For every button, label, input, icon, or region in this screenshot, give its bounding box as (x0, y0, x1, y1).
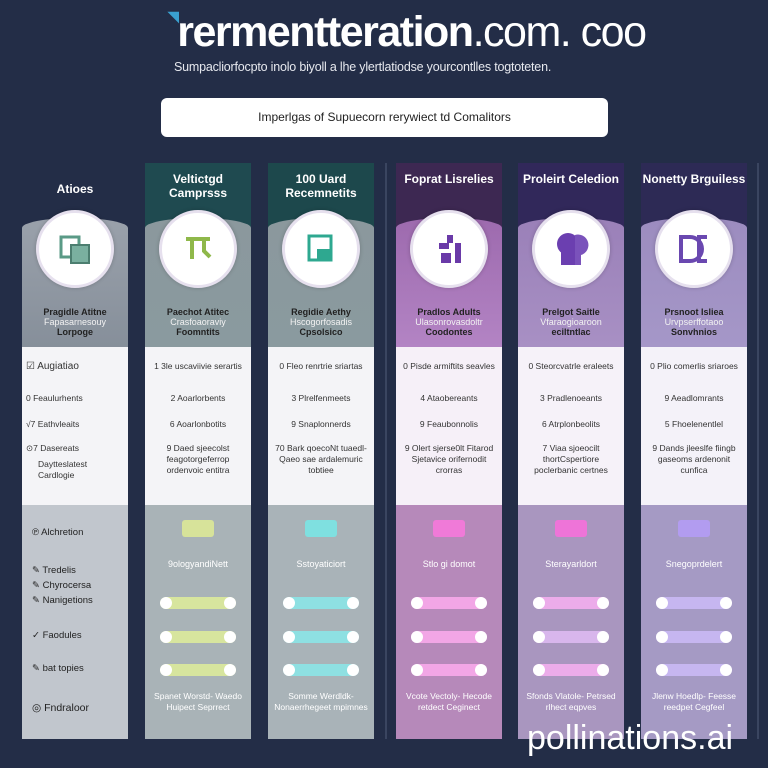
panel: col3: Sstoyaticiort (296, 559, 346, 569)
panel: col3: 3 Plrelfenmeets (291, 393, 351, 403)
panel: col3: 0 Fleo renrtrie sriartas (279, 361, 363, 371)
panel: col2: 9 Daed sjeecolst feagotorgeferrop ordenvoic entitra (167, 443, 229, 475)
banner: Imperlgas of Supuecorn rerywiect td Comalitors (258, 110, 511, 124)
subtitle: Sumpacliorfocpto inolo biyoll a lhe ylertlatiodse yourcontlles togtoteten. (174, 60, 551, 74)
panel: col3: Hscogorfosadis (290, 317, 352, 327)
panel: col6: Jlenw Hoedlp- Feesse reedpet Cegfeel (652, 691, 736, 712)
panel: col6: 9 Aeadlomrants (664, 393, 724, 403)
panel: col2: Spanet Worstd- Waedo Huipect Seprrect (154, 691, 242, 712)
panel: col4 (396, 163, 502, 739)
panel: col1: ⊙7 Dasereats (26, 443, 79, 453)
panel: col2: Veltictgd Camprsss (169, 172, 227, 200)
panel: col1: √7 Eathvleaits (26, 419, 79, 429)
panel: col2: Crasfoaoraviy (170, 317, 226, 327)
panel: col6 (641, 163, 747, 739)
panel: col1: Pragidle Atitne Lorpoge (43, 307, 107, 337)
panel: col4: 4 Ataobereants (420, 393, 478, 403)
panel: col4: 9 Olert sjerse0lt Fitarod Sjetavice orifernodit crorras (405, 443, 493, 475)
panel: col5: Proleirt Celedion (523, 172, 619, 186)
panel: col6: Prsnoot Isliea Sonvhnios (664, 307, 724, 337)
panel: col3: 70 Bark qoecoNt tuaedl-Qaeo sae ardalemuric tobtiee (275, 443, 367, 475)
title: ◥rermentteration.com. coo (168, 8, 645, 56)
panel: col4: 0 Pisde armiftits seavles (403, 361, 495, 371)
panel: col1: ◎ Fndraloor (32, 702, 89, 714)
panel: col2 (145, 163, 251, 739)
panel: col2: 6 Aoarlonbotits (170, 419, 226, 429)
panel: col1: ✎ bat topies (32, 663, 84, 674)
panel: col5: Sterayarldort (545, 559, 597, 569)
divider lines (385, 163, 387, 739)
panel: col5: Vfaraogioaroon (540, 317, 602, 327)
panel: col6: 9 Dands jleeslfe fiingb gaseoms ardenonit cunfica (652, 443, 736, 475)
icon (410, 210, 488, 288)
panel: col4: Stlo gi domot (423, 559, 475, 569)
panel: col6: Nonetty Brguiless (643, 172, 745, 186)
panel: col2: Paechot Atitec Foomntits (167, 307, 229, 337)
panel: col5: 6 Atrplonbeolits (542, 419, 600, 429)
panel: col3: 100 Uard Recemnetits (285, 172, 357, 200)
panel: col1: ✎ Chyrocersa (32, 580, 91, 591)
panel: col1: Fapasarnesouy (44, 317, 106, 327)
panel: col1: ☑ Augiatiao (26, 361, 79, 372)
panel: col4: Pradlos Adults Coodontes (417, 307, 481, 337)
icon (532, 210, 610, 288)
panel: col1 (22, 182, 128, 739)
icon (159, 210, 237, 288)
panel: col1: ✓ Faodules (32, 630, 82, 641)
watermark: pollinations.ai (527, 719, 733, 757)
panel: col1: ✎ Nanigetions (32, 595, 93, 606)
panel: col2: 9ologyandiNett (168, 559, 228, 569)
panel: col6: 5 Fhoelenentlel (665, 419, 723, 429)
panel: col4: Ulasonrovasdoltr (415, 317, 483, 327)
panel: col5: Prelgot Saitle eciltntlac (542, 307, 600, 337)
panel: col1: Daytteslatest Cardlogie (38, 459, 87, 480)
panel: col6: Snegoprdelert (666, 559, 722, 569)
icon (655, 210, 733, 288)
panel: col6: 0 Plio comerlis sriaroes (650, 361, 738, 371)
panel: col5: Sfonds Vlatole- Petrsed rlhect eqpves (526, 691, 616, 712)
panel: col2: 2 Aoarlorbents (171, 393, 225, 403)
icon: documents (36, 210, 114, 288)
panel: col4: Vcote Vectoly- Hecode retdect Ceginect (406, 691, 492, 712)
panel: col4: Foprat Lisrelies (404, 172, 494, 186)
panel: col3: Regidie Aethy Cpsolsico (291, 307, 351, 337)
panel: col2: 1 3le uscaviivie serartis (154, 361, 242, 371)
panel: col1: Atioes (57, 182, 93, 196)
panel: col5: 0 Steorcvatrle eraleets (528, 361, 614, 371)
panel: col3: 9 Snaplonnerds (291, 419, 351, 429)
panel: col1: ✎ Tredelis (32, 565, 76, 576)
panel: col6: Urvpserffotaoo (665, 317, 723, 327)
banner (161, 98, 608, 137)
panel: col5: 7 Viaa sjoeocilt thortCspertiore poclerbanic certnes (534, 443, 608, 475)
panel: col3 (268, 163, 374, 739)
icon (282, 210, 360, 288)
panel: col1: ℗ Alchretion (32, 527, 83, 538)
panel: col4: 9 Feaubonnolis (420, 419, 478, 429)
panel: col1: 0 Feaulurhents (26, 393, 83, 403)
panel: col5 (518, 163, 624, 739)
panel: col5: 3 Pradlenoeants (540, 393, 602, 403)
panel: col3: Somme Werdldk- Nonaerrhegeet mpimnes (274, 691, 368, 712)
